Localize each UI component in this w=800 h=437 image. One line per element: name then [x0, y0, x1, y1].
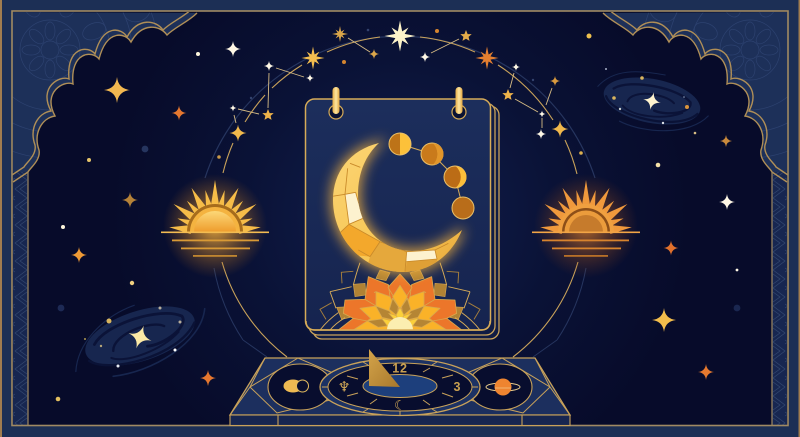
phase: half	[389, 133, 411, 155]
moon phases	[389, 133, 474, 219]
crescent glow	[333, 143, 462, 272]
sunset: right sun	[532, 174, 640, 278]
calendar front page	[306, 99, 490, 330]
mandala center petals	[389, 285, 411, 321]
crescent body	[333, 143, 462, 272]
phase: crescent	[444, 166, 467, 188]
scattered stars	[71, 41, 735, 386]
constellation lines	[234, 38, 552, 128]
dial numeral 12: 12	[392, 362, 408, 376]
calendar ring left	[329, 87, 343, 119]
mandala orange petals left	[338, 277, 400, 330]
sundial left medallion	[268, 364, 332, 410]
calendar ring right	[452, 87, 466, 119]
sundial base	[230, 358, 570, 426]
calendar back pages	[309, 103, 499, 339]
dial glyph moon: ☾	[394, 398, 406, 414]
mandala back ornaments right	[410, 263, 480, 330]
mandala petals right	[400, 292, 447, 330]
mandala sun center	[387, 317, 413, 330]
crescent facets	[332, 163, 448, 275]
mandala orange petals right	[400, 277, 462, 330]
dial glyph neptune: ♆	[338, 380, 350, 396]
sundial dial	[320, 358, 480, 416]
sundial gnomon	[369, 349, 400, 387]
sundial right medallion	[468, 364, 532, 410]
mandala back ornaments left	[320, 263, 390, 330]
phase: full	[452, 197, 474, 219]
phase: waning	[421, 143, 444, 165]
galaxy: upper right	[591, 63, 714, 141]
sundial	[230, 349, 570, 426]
sunrise: left sun	[161, 174, 269, 278]
scattered dots	[56, 29, 740, 401]
crescent moon	[332, 143, 462, 275]
celestial arcs	[205, 36, 595, 357]
galaxy: lower left	[62, 285, 217, 389]
dial numeral 3: 3	[454, 380, 461, 394]
calendar	[306, 87, 499, 339]
corner ornament: top left	[0, 0, 197, 425]
mandala	[320, 263, 480, 330]
constellation stars	[230, 20, 568, 142]
mandala petals left	[353, 292, 400, 330]
mandala center orange petal	[388, 274, 412, 296]
corner ornament: top right	[603, 0, 800, 425]
calendar bottom edge	[306, 321, 490, 330]
